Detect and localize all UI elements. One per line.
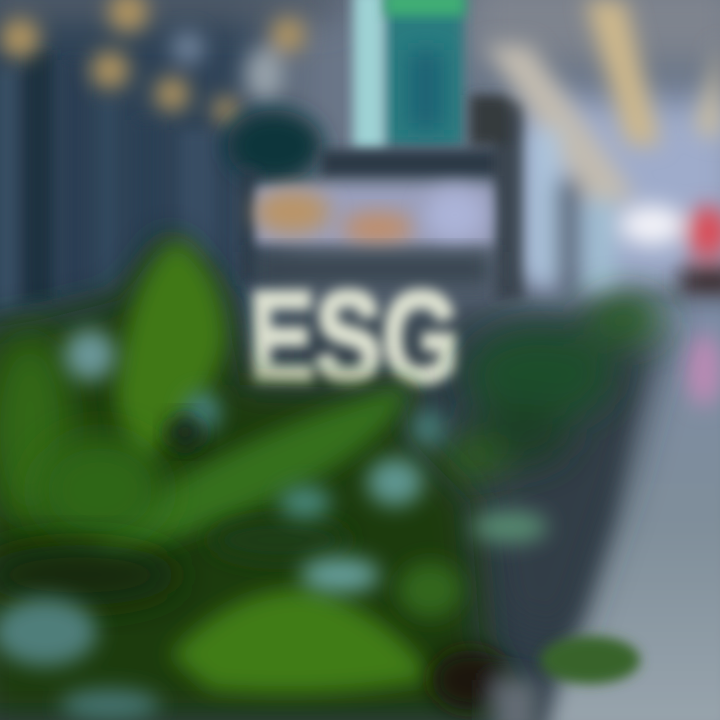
light display panel	[252, 186, 492, 286]
left green foliage	[0, 235, 520, 720]
grey planter at right	[470, 320, 668, 640]
warm ceiling lights	[0, 0, 305, 123]
top ceiling band	[0, 0, 720, 60]
dark sign frame	[240, 95, 524, 300]
left wall columns	[0, 50, 215, 310]
dark teal blob	[227, 110, 323, 182]
left leaf	[0, 335, 72, 525]
dark shade at leaf base	[167, 416, 203, 448]
teal pale leaves	[0, 329, 548, 720]
floor at right	[540, 300, 720, 720]
ESG sign letters: ESG	[248, 264, 460, 410]
teal hanging sign	[353, 0, 465, 150]
right green foliage	[434, 296, 663, 480]
right perspective light streaks	[485, 0, 720, 302]
bottom right green leaf	[540, 636, 640, 684]
dark pot at bottom	[432, 650, 538, 720]
tall leaf	[115, 240, 226, 465]
lower leaf	[170, 589, 430, 693]
centre long leaf	[100, 385, 410, 560]
